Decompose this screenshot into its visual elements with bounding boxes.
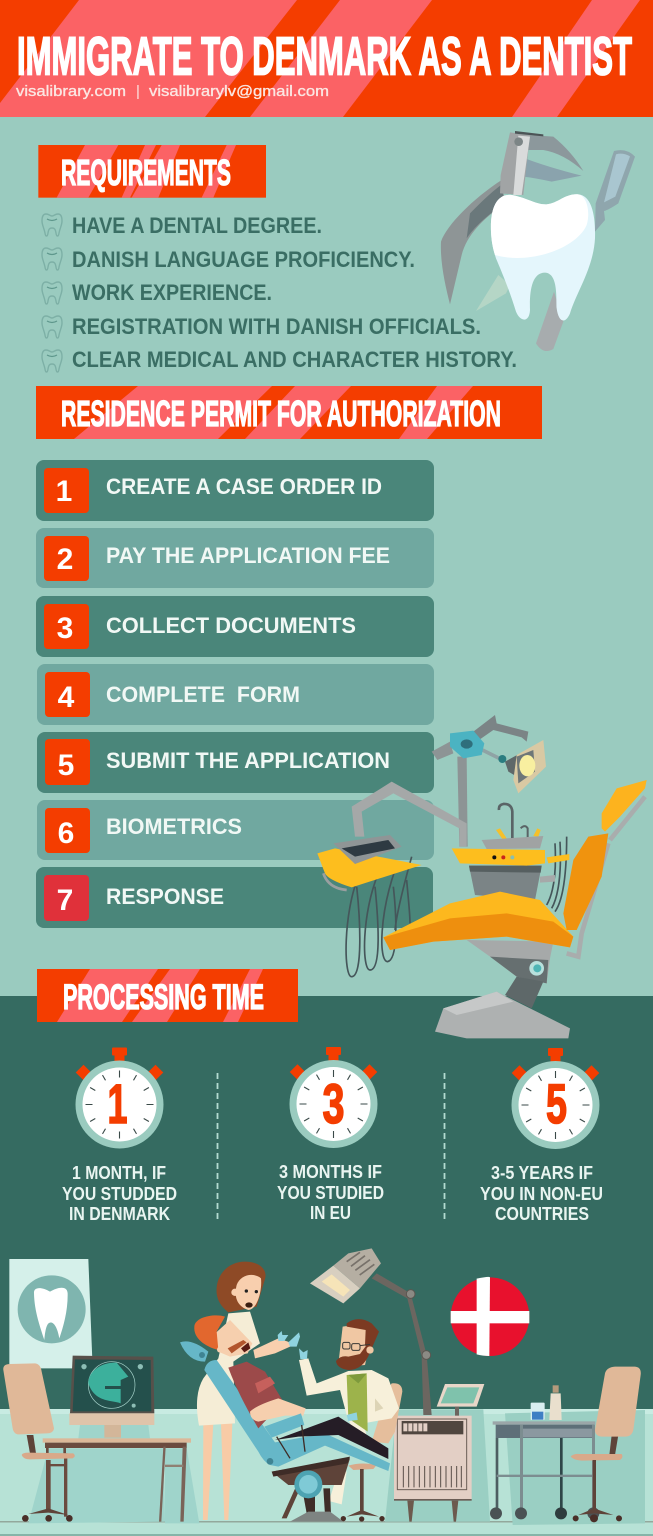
headrest bbox=[602, 780, 647, 832]
step 6 bbox=[37, 800, 434, 860]
caption 2: IN EU bbox=[310, 1203, 351, 1223]
icon: tooth bbox=[42, 214, 62, 236]
step 7: 7 bbox=[57, 884, 73, 917]
panel: processing times bbox=[62, 1047, 603, 1224]
machine bbox=[394, 1384, 484, 1522]
stopwatch 3 bbox=[512, 1048, 600, 1149]
caption 2: 3 MONTHS IF bbox=[279, 1162, 382, 1182]
illustration: dental clinic left bbox=[3, 1259, 199, 1523]
step 3: COLLECT DOCUMENTS bbox=[106, 613, 356, 638]
list: requirements bbox=[42, 213, 517, 372]
requirement 3: WORK EXPERIENCE. bbox=[72, 280, 272, 305]
illustration: floor bbox=[0, 1409, 653, 1536]
flag of Denmark bbox=[451, 1277, 529, 1356]
tray bbox=[317, 848, 422, 887]
step 2: PAY THE APPLICATION FEE bbox=[106, 543, 390, 568]
dentist bbox=[299, 1319, 399, 1504]
icon: tooth bbox=[42, 316, 62, 338]
stopwatch 3: 5 bbox=[546, 1072, 567, 1135]
caption 3: 3-5 YEARS IF bbox=[491, 1163, 593, 1183]
step 5: SUBMIT THE APPLICATION bbox=[106, 748, 390, 773]
step 5: 5 bbox=[58, 749, 74, 782]
backrest bbox=[563, 833, 608, 930]
trolley with bottles bbox=[490, 1385, 599, 1519]
contact line: visalibrary.com bbox=[16, 83, 126, 100]
caption 3: COUNTRIES bbox=[495, 1204, 589, 1224]
requirement 4: REGISTRATION WITH DANISH OFFICIALS. bbox=[72, 314, 481, 339]
sink bbox=[499, 804, 512, 838]
lamp arm and post bbox=[457, 757, 468, 847]
poster bbox=[9, 1259, 93, 1368]
icon: tooth bbox=[42, 248, 62, 270]
divider bbox=[444, 1073, 446, 1223]
contact line bbox=[16, 83, 329, 100]
stopwatch 1: 1 bbox=[108, 1072, 128, 1135]
caption 3 bbox=[480, 1163, 603, 1224]
step 7: RESPONSE bbox=[106, 884, 224, 909]
steps list bbox=[36, 460, 434, 928]
caption 1: 1 MONTH, IF bbox=[72, 1163, 166, 1183]
stopwatch 2 bbox=[290, 1047, 378, 1148]
caption 1: IN DENMARK bbox=[69, 1204, 170, 1224]
caption 2: YOU STUDIED bbox=[277, 1183, 384, 1203]
illustration: tooth with forceps and mirror bbox=[441, 131, 635, 351]
yellow shelf bbox=[452, 848, 545, 866]
side arm bbox=[352, 782, 467, 847]
caption 3: YOU IN NON-EU bbox=[480, 1184, 603, 1204]
heading: requirements bbox=[38, 145, 266, 198]
pedestal bbox=[505, 977, 543, 1008]
requirement 2: DANISH LANGUAGE PROFICIENCY. bbox=[72, 247, 415, 272]
step 4: COMPLETE FORM bbox=[106, 682, 300, 707]
step 6: 6 bbox=[58, 817, 74, 850]
stopwatch 2: 3 bbox=[322, 1072, 344, 1135]
illustration: dentist, nurse and patient bbox=[180, 1248, 402, 1522]
step 4: 4 bbox=[58, 681, 75, 714]
examination lamp arm bbox=[372, 1273, 432, 1415]
step 5 bbox=[37, 732, 434, 793]
heading: processing time bbox=[37, 969, 298, 1022]
patient chair bbox=[180, 1341, 390, 1522]
caption 1: YOU STUDDED bbox=[62, 1184, 177, 1204]
header banner bbox=[0, 0, 653, 117]
illustration: dental chair bbox=[317, 715, 647, 1038]
shadows bbox=[28, 1448, 165, 1523]
contact line: visalibrarylv@gmail.com bbox=[149, 83, 329, 100]
hoses bbox=[346, 837, 567, 977]
heading: residence permit bbox=[36, 386, 542, 439]
step 2 bbox=[36, 528, 434, 588]
monitor bbox=[69, 1356, 154, 1438]
seat bbox=[383, 892, 573, 950]
step 4 bbox=[37, 664, 434, 725]
illustration: dental clinic right bbox=[372, 1273, 645, 1525]
heading: requirements: REQUIREMENTS bbox=[61, 152, 231, 193]
requirement 5: CLEAR MEDICAL AND CHARACTER HISTORY. bbox=[72, 347, 517, 372]
step 3 bbox=[36, 596, 434, 657]
contact line: | bbox=[136, 83, 140, 100]
icon: tooth bbox=[42, 282, 62, 304]
heading: processing time: PROCESSING TIME bbox=[63, 978, 264, 1017]
desk bbox=[43, 1438, 191, 1522]
examination lamp head bbox=[310, 1248, 381, 1303]
step 7 bbox=[36, 867, 433, 928]
under seat bbox=[467, 940, 553, 983]
nurse bbox=[197, 1262, 300, 1520]
step 1: 1 bbox=[56, 475, 72, 508]
office chair bbox=[3, 1363, 75, 1522]
step 1: CREATE A CASE ORDER ID bbox=[106, 474, 382, 499]
floor shadows bbox=[385, 1409, 490, 1522]
step 6: BIOMETRICS bbox=[106, 814, 242, 839]
requirement 1: HAVE A DENTAL DEGREE. bbox=[72, 213, 322, 238]
icon: tooth bbox=[42, 350, 62, 372]
divider bbox=[216, 1073, 218, 1223]
dentist stool and chair bbox=[341, 1383, 402, 1522]
step 1 bbox=[36, 460, 434, 521]
column bbox=[469, 866, 542, 900]
frame bbox=[567, 797, 645, 957]
stopwatch 1 bbox=[76, 1048, 164, 1148]
office chair bbox=[571, 1367, 641, 1522]
caption 2 bbox=[277, 1162, 384, 1223]
patient bbox=[194, 1315, 388, 1459]
caption 1 bbox=[62, 1163, 177, 1224]
step 2: 2 bbox=[57, 543, 73, 576]
step 3: 3 bbox=[57, 612, 73, 645]
